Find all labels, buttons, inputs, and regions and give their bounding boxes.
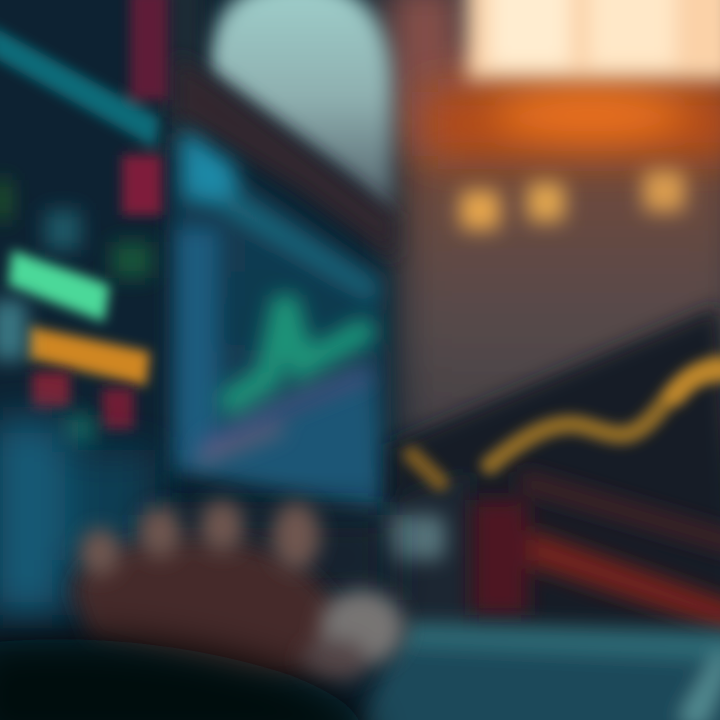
panel: teal arch window	[205, 0, 392, 215]
hand thumb	[301, 590, 404, 682]
icon: hand	[72, 500, 404, 682]
icon: red ticker blocks	[32, 372, 134, 430]
chart: green monitor trend	[200, 298, 365, 460]
panel: left screen ticker	[0, 180, 152, 445]
icon: dim green ticker blocks	[0, 180, 152, 445]
hand fingers	[80, 500, 320, 576]
panel: shadow below monitor	[150, 515, 390, 600]
chart: red lower bars	[472, 470, 720, 635]
panel: dark foreground	[0, 639, 370, 720]
hand palm	[72, 540, 346, 681]
panel: lower right dark desk	[390, 305, 720, 640]
panel: left screen stripes	[0, 0, 168, 215]
panel: lower left teal column	[0, 420, 155, 615]
icon: wall lights	[460, 170, 685, 230]
panel: bright window	[466, 0, 720, 80]
panel: left dark column	[0, 0, 205, 640]
panel: right wall	[385, 0, 720, 450]
panel: orange glow band	[425, 82, 720, 156]
icon: orange ticker block	[28, 326, 150, 386]
chart: yellow market line	[412, 364, 720, 482]
panel: central monitor	[172, 130, 384, 512]
panel: dark diagonal beam	[175, 55, 395, 260]
panel: keyboard	[360, 515, 720, 720]
icon: green ticker block	[8, 250, 110, 322]
